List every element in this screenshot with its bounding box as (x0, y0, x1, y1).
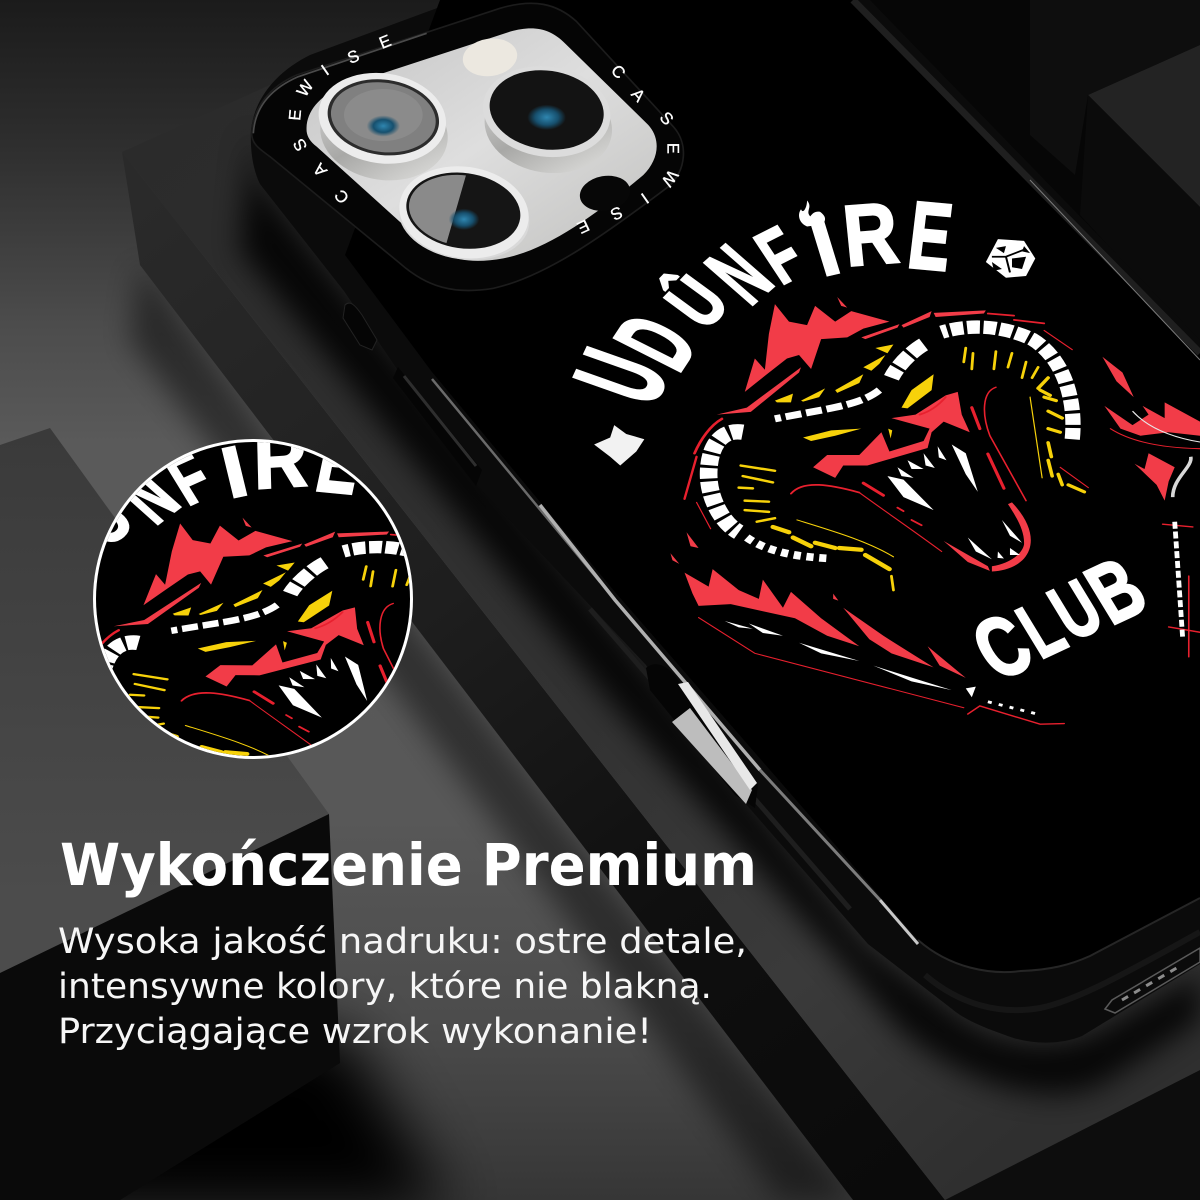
callout: magnified print detail: R (253, 414, 308, 506)
volume button (393, 367, 482, 486)
description text: intensywne kolory, które nie blakną. (58, 967, 712, 1007)
camera bump ring (252, 3, 683, 291)
title lettering: UDÛNFIRE: R (839, 185, 902, 285)
ring lettering: CASEWISE (285, 31, 683, 237)
title lettering: UDÛNFIRE: N (687, 229, 792, 320)
lettering: CLUB: U (1034, 563, 1117, 657)
ring lettering: CASEWISE: S (345, 46, 362, 68)
title lettering: UDÛNFIRE (549, 182, 957, 418)
heading: Wykończenie Premium (60, 831, 757, 899)
ring lettering: CASEWISE: I (638, 189, 652, 207)
ring lettering: CASEWISE: E (574, 216, 592, 237)
ring lettering: CASEWISE: A (309, 159, 331, 180)
phone soft shadow (240, 130, 1200, 1094)
lettering: CLUB: C (957, 596, 1048, 699)
title lettering: UDÛNFIRE: I (802, 204, 849, 293)
lettering: CLUB: B (1070, 540, 1162, 642)
callout: magnified print detail: U (56, 483, 150, 558)
lower right dark block (945, 1070, 1200, 1200)
ring lettering: CASEWISE: C (331, 186, 353, 207)
camera glass plate (307, 28, 657, 261)
phone case (251, 0, 1200, 1043)
description text: Przyciągające wzrok wykonanie! (58, 1012, 652, 1052)
lettering: CLUB: L (1003, 584, 1080, 675)
camera module (252, 3, 683, 291)
callout: magnified print detail: F (153, 436, 225, 520)
ring lettering: CASEWISE: S (608, 202, 626, 224)
title lettering: UDÛNFIRE: U (549, 336, 695, 418)
ring lettering: CASEWISE: E (376, 31, 394, 53)
callout: magnified print detail: I (214, 431, 255, 514)
print: dragon illustration on case (549, 182, 1200, 724)
flash (460, 35, 520, 80)
callout: magnified print detail (93, 439, 413, 759)
ring lettering: CASEWISE: E (664, 143, 683, 154)
top right background blocks (853, 0, 1200, 370)
icon: star ornament (594, 425, 644, 466)
phone screen surface (345, 0, 1200, 972)
lens three (400, 166, 529, 260)
ring lettering: CASEWISE: S (656, 108, 677, 129)
description text (58, 922, 747, 1052)
ring lettering: CASEWISE: S (289, 135, 311, 154)
ring lettering: CASEWISE: C (607, 61, 629, 83)
title lettering: UDÛNFIRE: Û (649, 262, 746, 342)
icon: flame on letter I (799, 201, 825, 227)
title lettering: UDÛNFIRE: F (742, 212, 819, 300)
lens one (313, 65, 454, 188)
callout: magnified print detail: E (309, 411, 370, 513)
title lettering: UDÛNFIRE: E (903, 182, 957, 292)
lettering: CLUB (957, 540, 1162, 699)
shadow under left block (0, 1030, 450, 1200)
ring lettering: CASEWISE: I (318, 61, 332, 79)
lens two (477, 58, 618, 181)
ring lettering: CASEWISE: A (627, 85, 650, 106)
title lettering: UDÛNFIRE: D (592, 299, 720, 385)
callout: magnified print detail: N (96, 452, 197, 538)
icon: polyhedral die (986, 239, 1035, 278)
ring lettering: CASEWISE: W (657, 166, 682, 190)
side hole top (343, 303, 377, 350)
description text: Wysoka jakość nadruku: ostre detale, (58, 922, 747, 962)
silver side button (646, 664, 758, 808)
microphone hole (577, 172, 633, 215)
charging port (1105, 948, 1200, 1013)
shadow below stand block (130, 265, 853, 1200)
ring lettering: CASEWISE: W (293, 76, 318, 100)
bottom-left block (0, 428, 340, 1200)
stand block side face (122, 152, 945, 1200)
ring lettering: CASEWISE: E (285, 109, 305, 121)
